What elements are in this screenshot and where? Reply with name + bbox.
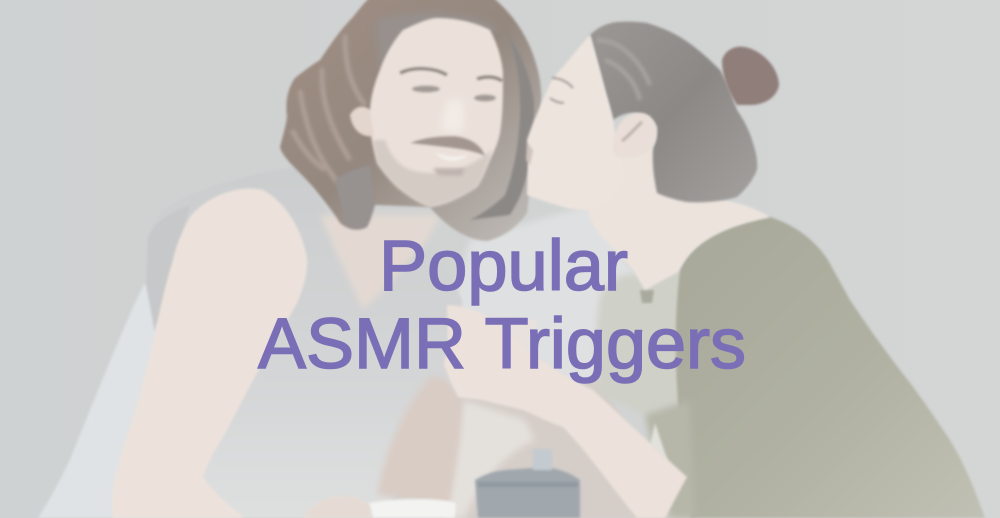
- man: chest: [320, 215, 440, 310]
- woman: hair: [590, 22, 757, 202]
- man: near arm: [112, 189, 307, 518]
- woman: face: [526, 35, 657, 210]
- man: beard: [373, 140, 492, 207]
- light area between the figures: [450, 205, 640, 400]
- man: hair: [280, 0, 541, 241]
- coffee cup: [368, 499, 456, 518]
- title: [258, 227, 746, 384]
- man: eyes and brows: [400, 69, 502, 81]
- woman: ear: [613, 113, 657, 158]
- title line 2: ASMR Triggers: [258, 305, 746, 384]
- table area: [440, 380, 680, 518]
- man: tank top: [38, 167, 462, 518]
- woman: light far side of shirt: [597, 270, 700, 518]
- man: far arm: [377, 377, 460, 505]
- woman: hair bun: [722, 47, 779, 105]
- cup in her hand: [460, 315, 537, 397]
- woman: hand and forearm: [444, 305, 687, 518]
- woman: neck and shoulder: [587, 130, 770, 290]
- man: hand on cup: [303, 496, 372, 518]
- man: face: [350, 18, 503, 207]
- title line 1: Popular: [379, 227, 628, 306]
- moka pot: [475, 449, 580, 518]
- woman: shirt: [676, 217, 985, 518]
